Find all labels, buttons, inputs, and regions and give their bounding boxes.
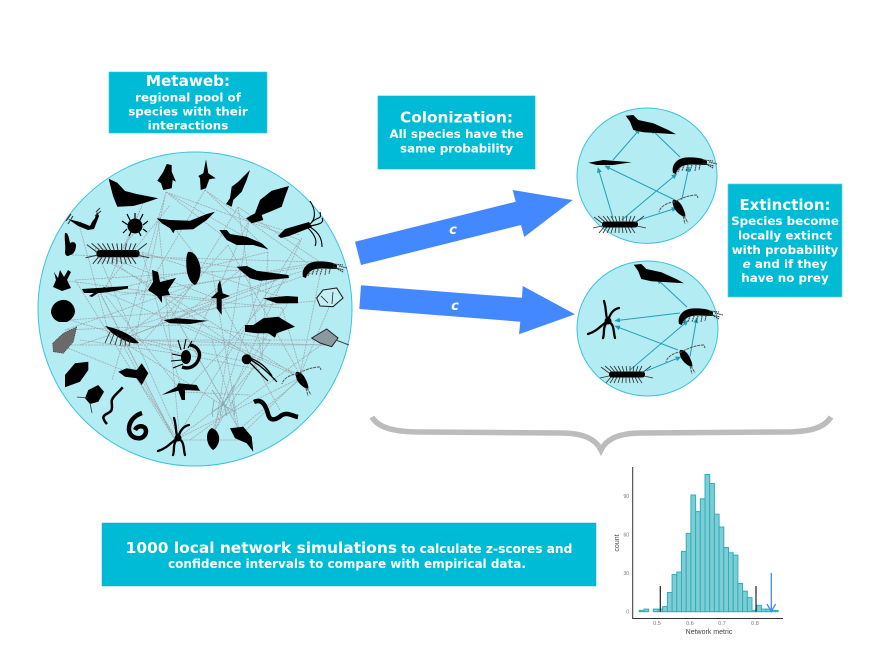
box: metaweb heading: species with their: [128, 104, 248, 118]
species: centipede: [86, 243, 149, 264]
histogram chart: 90: [623, 494, 629, 500]
species: sausage: [263, 296, 298, 303]
box: colonization: [378, 96, 535, 169]
histogram chart: 60: [623, 532, 629, 538]
species: albatross: [211, 280, 230, 315]
species: kelp: [65, 233, 76, 256]
box: metaweb heading: Metaweb:: [146, 72, 230, 90]
species: brittle star: [158, 418, 189, 455]
panel: local network 2: [577, 261, 723, 396]
species: stick fish: [588, 160, 632, 165]
tick labels: 0.7: [718, 621, 726, 627]
species: penguin: [157, 164, 176, 190]
species: stick fish: [163, 318, 208, 324]
tick labels: 0.8: [751, 621, 759, 627]
panel: local network 1: [577, 108, 717, 243]
species: faded arthropod: [212, 385, 235, 417]
species: spiral worm: [129, 413, 146, 438]
tick labels: [653, 621, 759, 627]
bars: [639, 474, 778, 612]
histogram chart: 30: [623, 571, 629, 577]
species: slim fish: [226, 170, 250, 207]
species: fish right: [245, 317, 295, 338]
box: colonization: Colonization:: [400, 108, 513, 126]
species: isopod: [77, 385, 104, 413]
tick labels: 0.6: [686, 621, 694, 627]
species: crab: [171, 339, 200, 368]
arrow: colonization upper: c: [449, 223, 457, 238]
species: raptor: [148, 270, 176, 303]
species: brittle star: [588, 301, 619, 338]
histogram chart: count: [614, 534, 621, 552]
species: feathered bird: [66, 208, 101, 230]
box: extinction: with probability: [732, 243, 839, 257]
species: small seal: [219, 230, 268, 249]
tick labels: 0.5: [653, 621, 661, 627]
box: extinction: Species become: [731, 214, 839, 228]
species: long shrimp: [105, 326, 139, 346]
species: shrimp: [303, 261, 347, 278]
box: simulations caption: confidence intervals to compare with empirical data.: [168, 557, 526, 571]
species: star: [162, 383, 200, 400]
species: squid: [278, 201, 323, 247]
species: blob fish: [118, 363, 148, 385]
box: extinction: locally extinct: [738, 228, 832, 242]
food web arrows: [598, 129, 689, 221]
confidence interval markers: [660, 586, 756, 612]
arrow: colonization lower: [359, 285, 575, 334]
species: seabird top: [198, 159, 216, 190]
species: scallop: [51, 300, 75, 322]
species: coral: [53, 270, 71, 291]
species: big fish: [246, 186, 289, 223]
species: shrimp: [673, 157, 717, 174]
arrow: colonization lower: c: [451, 299, 459, 314]
species: oval plankton: [207, 428, 219, 450]
species: centipede: [600, 366, 653, 383]
species: polychaete: [254, 401, 298, 419]
species: flatworm leaf: [65, 362, 88, 387]
box: simulations caption: 1000 local network simulations to calculate z-scores and: [126, 539, 572, 557]
axis titles: Network metric: [686, 629, 733, 636]
brace: [372, 417, 831, 450]
species: seal: [626, 115, 676, 134]
species: copepod: [666, 345, 705, 374]
box: extinction: e and if they: [743, 257, 828, 271]
species: shrimp: [679, 308, 723, 325]
network interaction lines: [60, 190, 330, 440]
box: extinction: [728, 184, 842, 297]
box: metaweb heading: [109, 72, 267, 133]
box: extinction: have no prey: [741, 271, 829, 285]
species: anemone: [122, 213, 148, 236]
species: seal: [634, 264, 684, 283]
food web arrows: [615, 279, 697, 371]
species: upright fish: [186, 252, 201, 285]
histogram chart: 0: [626, 610, 629, 616]
species: blob outline: [312, 329, 349, 347]
species: jellyfish: [242, 354, 277, 382]
panel: metaweb circle: [38, 152, 352, 466]
species: sea mammal: [237, 266, 289, 281]
species: whale: [157, 212, 215, 233]
species: clam outline: [317, 288, 343, 307]
arrow: colonization upper: [355, 190, 573, 265]
axes: [633, 467, 783, 618]
empirical value arrow: [767, 573, 776, 612]
box: simulations caption: [102, 523, 596, 586]
histogram chart: [614, 467, 783, 636]
species: copepod: [282, 367, 321, 396]
species: sea stick cluster: [82, 286, 128, 297]
box: colonization: same probability: [400, 141, 513, 155]
box: metaweb heading: regional pool of: [135, 90, 242, 104]
box: colonization: All species have the: [389, 127, 524, 141]
box: metaweb heading: interactions: [148, 118, 228, 132]
species: amphipod: [230, 427, 253, 452]
species: thin worm: [103, 387, 123, 424]
species: large seal: [109, 179, 158, 207]
species: oyster: [53, 327, 77, 353]
species: copepod: [659, 195, 698, 224]
species silhouettes: [51, 159, 349, 455]
species: centipede: [593, 216, 646, 233]
box: extinction: Extinction:: [739, 196, 831, 214]
